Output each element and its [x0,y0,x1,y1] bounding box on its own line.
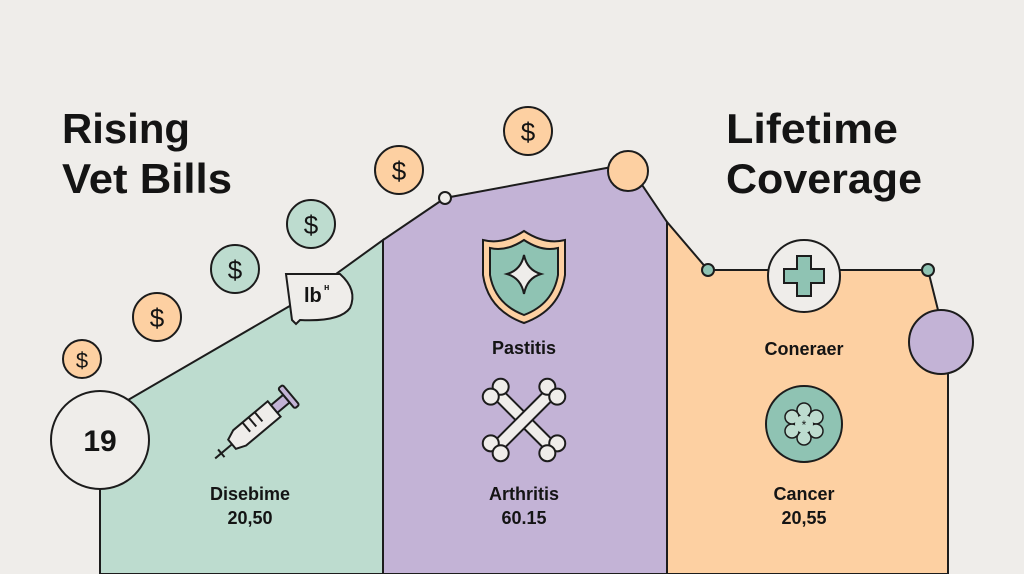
label: Disebime: Disebime [210,484,290,504]
label: Pastitis: Pastitis [492,338,556,358]
callout: speech bubble [286,274,352,324]
title: Lifetime Coverage: Lifetime [726,105,898,152]
label: Cancer: 20,55 [781,508,827,528]
label: Arthritis: Arthritis [489,484,559,504]
title: Rising Vet Bills [62,105,232,202]
title: Lifetime Coverage: Coverage [726,155,922,202]
title: Lifetime Coverage [726,105,922,202]
label: Disebime: 20,50 [227,508,273,528]
node: 19 circle: 19 [83,425,117,458]
panel: green [100,240,383,574]
text: $ [304,210,319,240]
nodes on line [439,151,973,374]
text: $ [228,255,243,285]
icon: shield [483,231,565,323]
callout: speech bubble: н [324,282,329,292]
panel: orange [667,222,948,574]
label: Cancer: Cancer [773,484,835,504]
text: $ [150,303,165,333]
icon: flower circle: * [802,418,807,432]
title: Rising Vet Bills: Vet Bills [62,155,232,202]
icon: crossed bones [479,375,569,465]
text: $ [521,117,536,147]
icon: flower circle [766,386,842,462]
panel: purple [383,164,667,574]
label: Arthritis: 60.15 [501,508,547,528]
label: Cancer [773,484,835,528]
label: Arthritis [489,484,559,528]
coins [63,107,552,378]
text: $ [76,348,88,373]
text: $ [392,156,407,186]
title: Rising Vet Bills: Rising [62,105,190,152]
callout: speech bubble: lb [304,285,322,307]
node: 19 circle [51,391,149,489]
label: Disebime [210,484,290,528]
icon: syringe [207,385,299,468]
label: Coneraer: Coneraer [764,339,844,359]
icon: cross circle [768,240,840,312]
